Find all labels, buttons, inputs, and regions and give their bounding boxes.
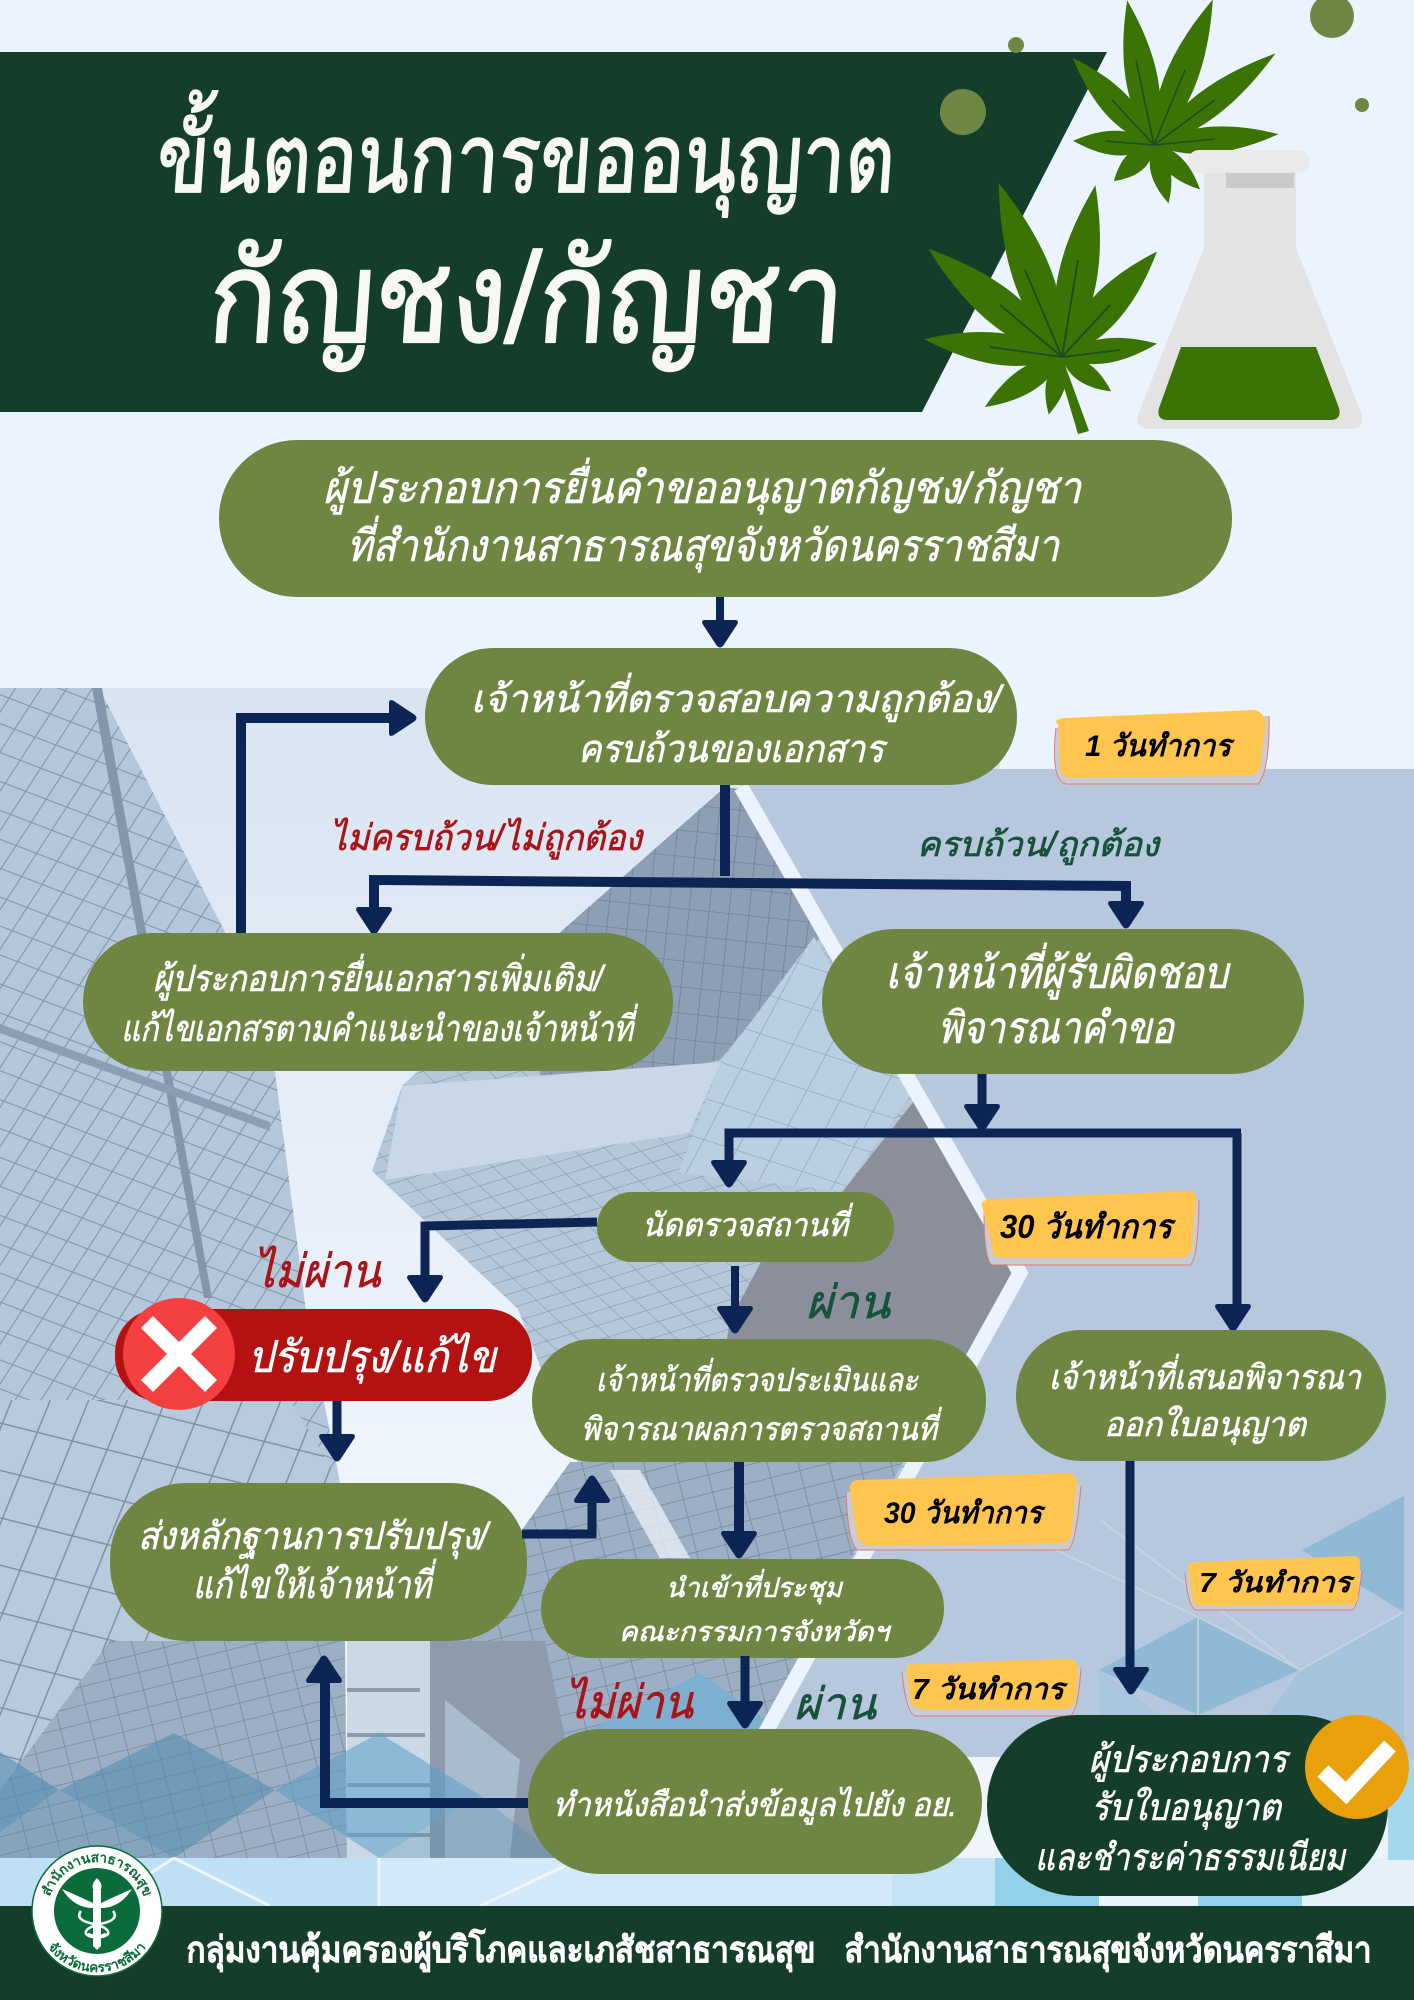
step: propose licence [1016,1330,1386,1461]
arrow: licence to recipient [1113,1461,1149,1694]
arrow: committee to letter [727,1656,763,1728]
badge: 1 working day [1054,710,1269,784]
icon: cannabis leaf top [1063,0,1284,206]
badge: 30 working days [982,1191,1199,1265]
footer bar [0,1906,1414,2000]
right blue-grey panel with diamond edge [741,769,1414,1757]
step: recipient receives licence [987,1715,1388,1896]
background photo: glass buildings [0,688,1012,1860]
icon: laboratory flask [1138,150,1362,429]
step: additional documents: แก้ไขเอกสรตามคำแนะนำของเจ้าหน้าที่ [121,1003,638,1049]
step: fix and improve [115,1298,532,1410]
logo: provincial health office [31,1845,163,1977]
title banner [0,52,1107,412]
label: failed: ไม่ผ่าน [254,1245,382,1297]
step: additional documents: ผู้ประกอบการยื่นเอกสารเพิ่มเติม/ [153,953,607,1001]
arrow: fix to evidence [319,1401,355,1462]
arrow: application to document check [702,597,738,648]
step: responsible officer: เจ้าหน้าที่ผู้รับผิดชอบ [886,942,1231,1000]
badge: 30 working days second [846,1473,1081,1550]
arrow: assessment to committee [721,1462,757,1558]
step: propose licence: ออกใบอนุญาต [1104,1405,1308,1445]
arrow: document check branches [356,785,1144,934]
step: assessment: เจ้าหน้าที่ตรวจประเมินและ [596,1358,920,1398]
logo: provincial health office: สำนักงานสาธารณสุข [42,1854,151,1896]
step: additional documents [83,933,673,1071]
title text [153,90,900,372]
step: committee meeting: นำเข้าที่ประชุม [666,1569,843,1605]
arrow: return loop to document check [241,700,416,933]
badge: 7 working days right: 7 วันทำการ [1199,1567,1355,1598]
step: recipient receives licence: และชำระค่าธรรมเนียม [1035,1837,1346,1878]
step: propose licence: เจ้าหน้าที่เสนอพิจารณา [1049,1354,1362,1397]
label: passed second: ผ่าน [794,1680,878,1729]
step: send evidence: ส่งหลักฐานการปรับปรุง/ [138,1516,491,1559]
badge: 30 working days: 30 วันทำการ [1000,1208,1177,1245]
step: submit application: ที่สำนักงานสาธารณสุขจังหวัดนครราชสีมา [347,515,1060,573]
step: responsible officer: พิจารณาคำขอ [938,1004,1175,1053]
step: official letter [528,1729,982,1874]
step: assessment [532,1339,986,1462]
step: send evidence [110,1483,527,1641]
label: failed second: ไม่ผ่าน [565,1676,694,1728]
logo: provincial health office: จังหวัดนครราชสีมา [50,1942,146,1972]
badge: 30 working days second: 30 วันทำการ [884,1497,1047,1530]
step: document check [425,648,1017,785]
label: passed: ผ่าน [806,1276,892,1328]
badge: 7 working days right [1185,1556,1362,1610]
arrow: officer branches [711,1074,1251,1332]
step: recipient receives licence: ผู้ประกอบการ [1089,1739,1291,1782]
step: site inspection: นัดตรวจสถานที่ [642,1203,854,1243]
step: site inspection [597,1192,894,1262]
icon: check mark [1305,1715,1409,1819]
title text: กัญชง/กัญชา [204,227,850,372]
step: send evidence: แก้ไขให้เจ้าหน้าที่ [193,1558,437,1607]
label: complete: ครบถ้วน/ถูกต้อง [917,826,1161,865]
step: assessment: พิจารณาผลการตรวจสถานที่ [581,1407,942,1447]
title text: ขั้นตอนการขออนุญาต [153,90,900,218]
label: incomplete: ไม่ครบถ้วน/ไม่ถูกต้อง [330,817,644,860]
step: recipient receives licence: รับใบอนุญาต [1091,1786,1283,1830]
step: committee meeting [541,1559,944,1658]
footer text [186,1928,1372,1973]
step: committee meeting: คณะกรรมการจังหวัดฯ [619,1617,892,1647]
badge: 1 working day: 1 วันทำการ [1085,730,1236,763]
step: submit application [219,440,1232,597]
badge: 7 working days centre: 7 วันทำการ [912,1674,1069,1706]
icon: cannabis leaf bottom [917,177,1169,434]
lower blue geometric pattern [0,1733,1414,1906]
badge: 7 working days centre [902,1659,1081,1716]
arrow: letter back to evidence [306,1656,528,1803]
step: submit application: ผู้ประกอบการยื่นคำขออนุญาตกัญชง/กัญชา [323,457,1082,515]
step: official letter: ทำหนังสือนำส่งข้อมูลไปยัง อย. [553,1786,957,1825]
arrow: failed inspection [407,1222,597,1302]
step: document check: เจ้าหน้าที่ตรวจสอบความถูกต้อง/ [471,672,1004,722]
footer text: กลุ่มงานคุ้มครองผู้บริโภคและเภสัชสาธารณสุข [186,1928,816,1973]
step: responsible officer [822,929,1304,1074]
step: fix and improve: ปรับปรุง/แก้ไข [248,1332,499,1384]
step: document check: ครบถ้วนของเอกสาร [578,729,888,771]
arrow: passed inspection [717,1266,753,1334]
decorative dots [940,0,1369,135]
arrow: evidence to assessment [522,1476,610,1534]
